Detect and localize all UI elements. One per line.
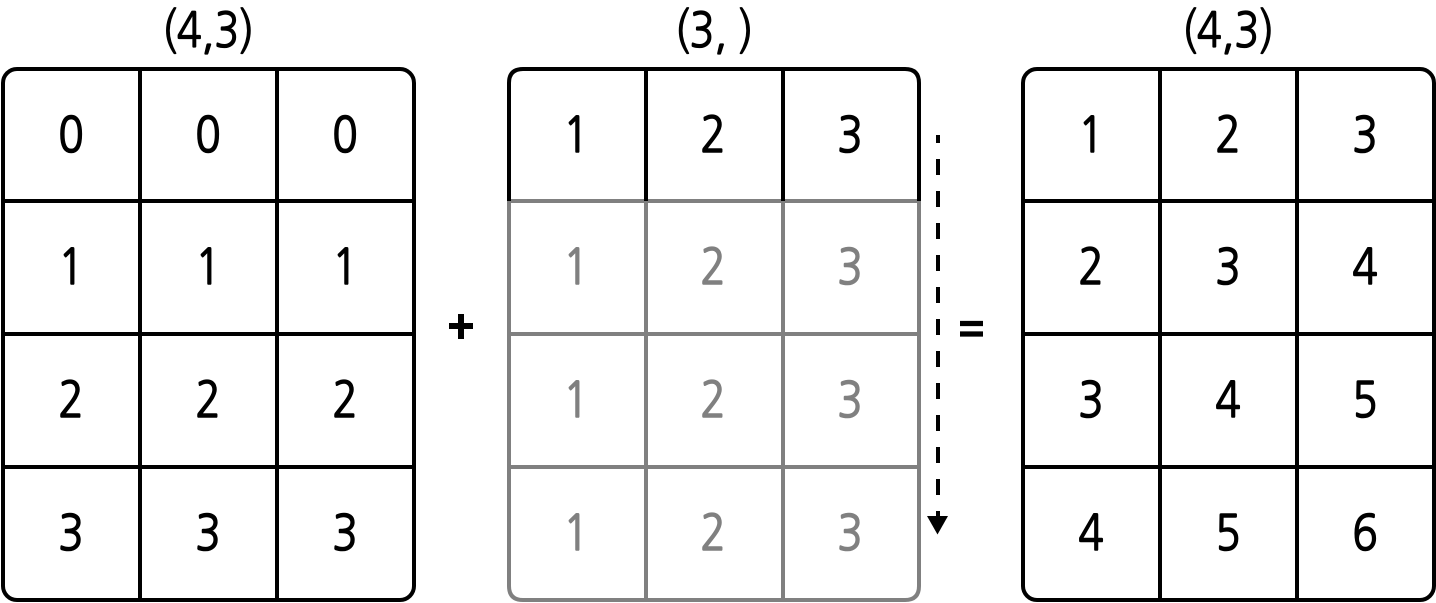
broadcast values: 1 — [563, 508, 589, 558]
arrow: broadcast direction — [927, 135, 948, 534]
shape label: result matrix: (4,3) — [1182, 7, 1274, 55]
left matrix values: 1 — [58, 242, 84, 292]
original row values: 3 — [837, 110, 863, 160]
original row values — [563, 110, 863, 160]
result matrix values: 5 — [1352, 375, 1378, 425]
broadcast values: 2 — [700, 375, 726, 425]
result matrix values: 4 — [1215, 375, 1241, 425]
middle array original row — [509, 69, 919, 201]
left matrix values — [58, 110, 358, 558]
equals sign — [960, 324, 983, 334]
left matrix values: 2 — [332, 375, 358, 425]
left matrix values: 1 — [332, 242, 358, 292]
original row values: 2 — [700, 110, 726, 160]
result matrix values: 6 — [1352, 508, 1378, 558]
result matrix values — [1078, 110, 1378, 558]
left matrix grid — [3, 69, 414, 600]
result matrix values: 2 — [1215, 110, 1241, 160]
left matrix values: 0 — [332, 110, 358, 160]
result matrix values: 4 — [1352, 242, 1378, 292]
left matrix values: 2 — [58, 375, 84, 425]
broadcast values: 1 — [563, 242, 589, 292]
result matrix values: 3 — [1352, 110, 1378, 160]
left matrix values: 3 — [195, 508, 221, 558]
result matrix values: 3 — [1078, 375, 1104, 425]
result matrix values: 3 — [1215, 242, 1241, 292]
result matrix values: 4 — [1078, 508, 1104, 558]
left matrix values: 0 — [195, 110, 221, 160]
plus sign — [449, 314, 473, 339]
left matrix values: 0 — [58, 110, 84, 160]
shape label: left matrix: (4,3) — [162, 7, 254, 55]
broadcast values: 2 — [700, 242, 726, 292]
result matrix values: 2 — [1078, 242, 1104, 292]
broadcast values — [563, 242, 863, 558]
broadcast values: 3 — [837, 508, 863, 558]
left matrix values: 3 — [58, 508, 84, 558]
broadcast values: 3 — [837, 242, 863, 292]
left matrix values: 2 — [195, 375, 221, 425]
result matrix values: 1 — [1078, 110, 1104, 160]
broadcast values: 3 — [837, 375, 863, 425]
result matrix values: 5 — [1215, 508, 1241, 558]
broadcast values: 2 — [700, 508, 726, 558]
left matrix values: 1 — [195, 242, 221, 292]
middle array broadcast grid — [509, 201, 919, 600]
left matrix values: 3 — [332, 508, 358, 558]
original row values: 1 — [563, 110, 589, 160]
result matrix grid — [1023, 69, 1434, 600]
broadcast values: 1 — [563, 375, 589, 425]
shape label: middle array: (3, ) — [674, 7, 754, 55]
